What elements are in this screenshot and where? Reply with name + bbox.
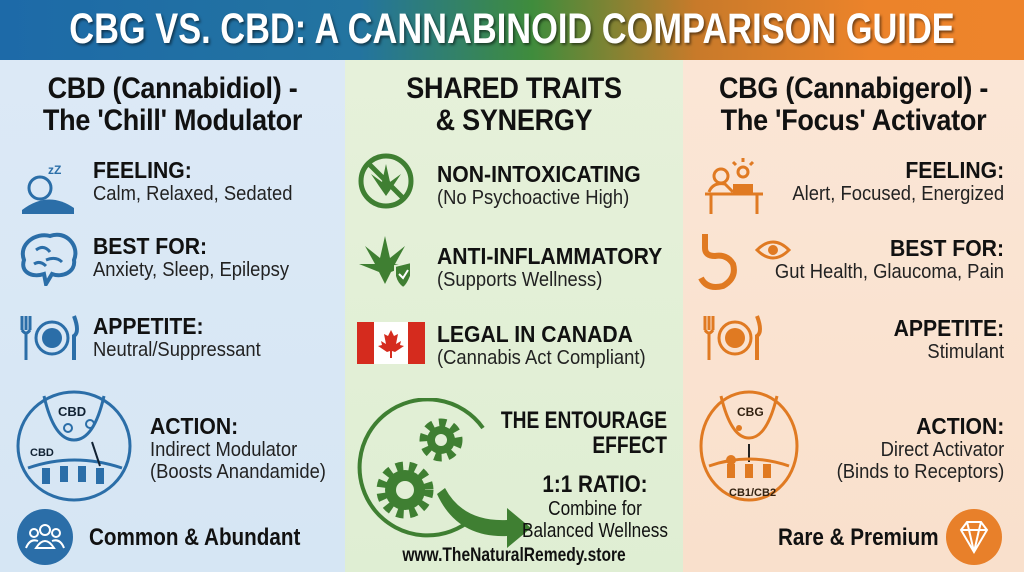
- text: non-intoxicating: [437, 161, 641, 209]
- icon: synapse CBD: CBD: [30, 447, 54, 459]
- text: entourage: EFFECT: [592, 432, 667, 459]
- text: entourage: THE ENTOURAGE: [501, 407, 667, 434]
- text: feeling right: Alert, Focused, Energized: [792, 183, 1004, 205]
- text: best for right: Gut Health, Glaucoma, Pain: [775, 261, 1004, 283]
- heading shared: [406, 72, 622, 137]
- text: action: (Boosts Anandamide): [150, 461, 326, 483]
- text: rare: Rare & Premium: [778, 524, 939, 551]
- icon: brain: [20, 232, 78, 286]
- icon: no leaf: [358, 154, 414, 208]
- panel: CBD: [0, 60, 345, 572]
- header banner: [0, 0, 1024, 61]
- text: ratio: [522, 471, 668, 542]
- text: action: Indirect Modulator: [150, 439, 297, 461]
- panel: shared: [345, 60, 683, 572]
- text: appetite right: APPETITE:: [893, 315, 1004, 341]
- text: best for: BEST FOR:: [93, 233, 207, 259]
- heading CBG: The 'Focus' Activator: [721, 104, 986, 137]
- icon: synapse CBD: [16, 390, 132, 502]
- text: legal: [437, 321, 646, 369]
- heading CBG: [719, 72, 988, 137]
- text: action right: [836, 413, 1004, 483]
- icon: diamond: [946, 509, 1002, 565]
- icon: gears arrow: [358, 398, 530, 548]
- text: feeling right: [792, 157, 1004, 205]
- heading shared: & SYNERGY: [436, 104, 592, 137]
- icon: synapse CBG: CBG: [737, 405, 764, 419]
- text: url: www.TheNaturalRemedy.store: [402, 545, 626, 566]
- text: action right: Direct Activator: [880, 439, 1004, 461]
- text: non-intoxicating: (No Psychoactive High): [437, 187, 629, 209]
- text: feeling: Calm, Relaxed, Sedated: [93, 183, 292, 205]
- text: appetite right: Stimulant: [927, 341, 1004, 363]
- text: common: Common & Abundant: [89, 524, 300, 551]
- text: appetite right: [893, 315, 1004, 363]
- icon: sleeping: [22, 163, 74, 214]
- text: anti-inflammatory: (Supports Wellness): [437, 269, 602, 291]
- panel: CBG: [683, 60, 1024, 572]
- text: best for right: [775, 235, 1004, 283]
- text: action: [150, 413, 326, 483]
- text: non-intoxicating: NON-INTOXICATING: [437, 161, 641, 187]
- icon: desk: [705, 158, 763, 214]
- text: best for: [93, 233, 289, 281]
- icon: leaf shield: [359, 236, 410, 287]
- heading CBD: [43, 72, 302, 137]
- text: appetite: Neutral/Suppressant: [93, 339, 261, 361]
- icon: plate: [20, 315, 79, 360]
- heading CBD: CBD (Cannabidiol) -: [48, 72, 297, 105]
- text: action: ACTION:: [150, 413, 238, 439]
- text: feeling: [93, 157, 292, 205]
- title: CBG VS. CBD: A CANNABINOID COMPARISON GUIDE: [69, 5, 955, 53]
- icon: sleeping: zZ: [48, 163, 61, 177]
- text: ratio: Combine for: [548, 498, 642, 520]
- icon: plate orange: [704, 315, 762, 360]
- text: feeling: FEELING:: [93, 157, 192, 183]
- text: action right: ACTION:: [916, 413, 1004, 439]
- text: best for: Anxiety, Sleep, Epilepsy: [93, 259, 289, 281]
- text: feeling right: FEELING:: [905, 157, 1004, 183]
- text: anti-inflammatory: [437, 243, 662, 291]
- text: ratio: 1:1 RATIO:: [542, 471, 648, 498]
- icon: canada flag: [357, 322, 425, 364]
- heading CBD: The 'Chill' Modulator: [43, 104, 302, 137]
- icon: synapse CBG: CB1/CB2: [729, 487, 776, 499]
- text: entourage: [501, 407, 667, 459]
- icon: stomach eye: [698, 234, 791, 290]
- text: action right: (Binds to Receptors): [836, 461, 1004, 483]
- heading CBG: CBG (Cannabigerol) -: [719, 72, 988, 105]
- icon: synapse CBD: CBD: [58, 404, 86, 419]
- heading shared: SHARED TRAITS: [406, 72, 622, 105]
- icon: people: [17, 509, 73, 565]
- text: ratio: Balanced Wellness: [522, 520, 668, 542]
- text: appetite: [93, 313, 261, 361]
- text: best for right: BEST FOR:: [890, 235, 1004, 261]
- text: appetite: APPETITE:: [93, 313, 204, 339]
- text: legal: (Cannabis Act Compliant): [437, 347, 646, 369]
- icon: synapse CBG: [700, 390, 798, 502]
- text: legal: LEGAL IN CANADA: [437, 321, 633, 347]
- text: anti-inflammatory: ANTI-INFLAMMATORY: [437, 243, 662, 269]
